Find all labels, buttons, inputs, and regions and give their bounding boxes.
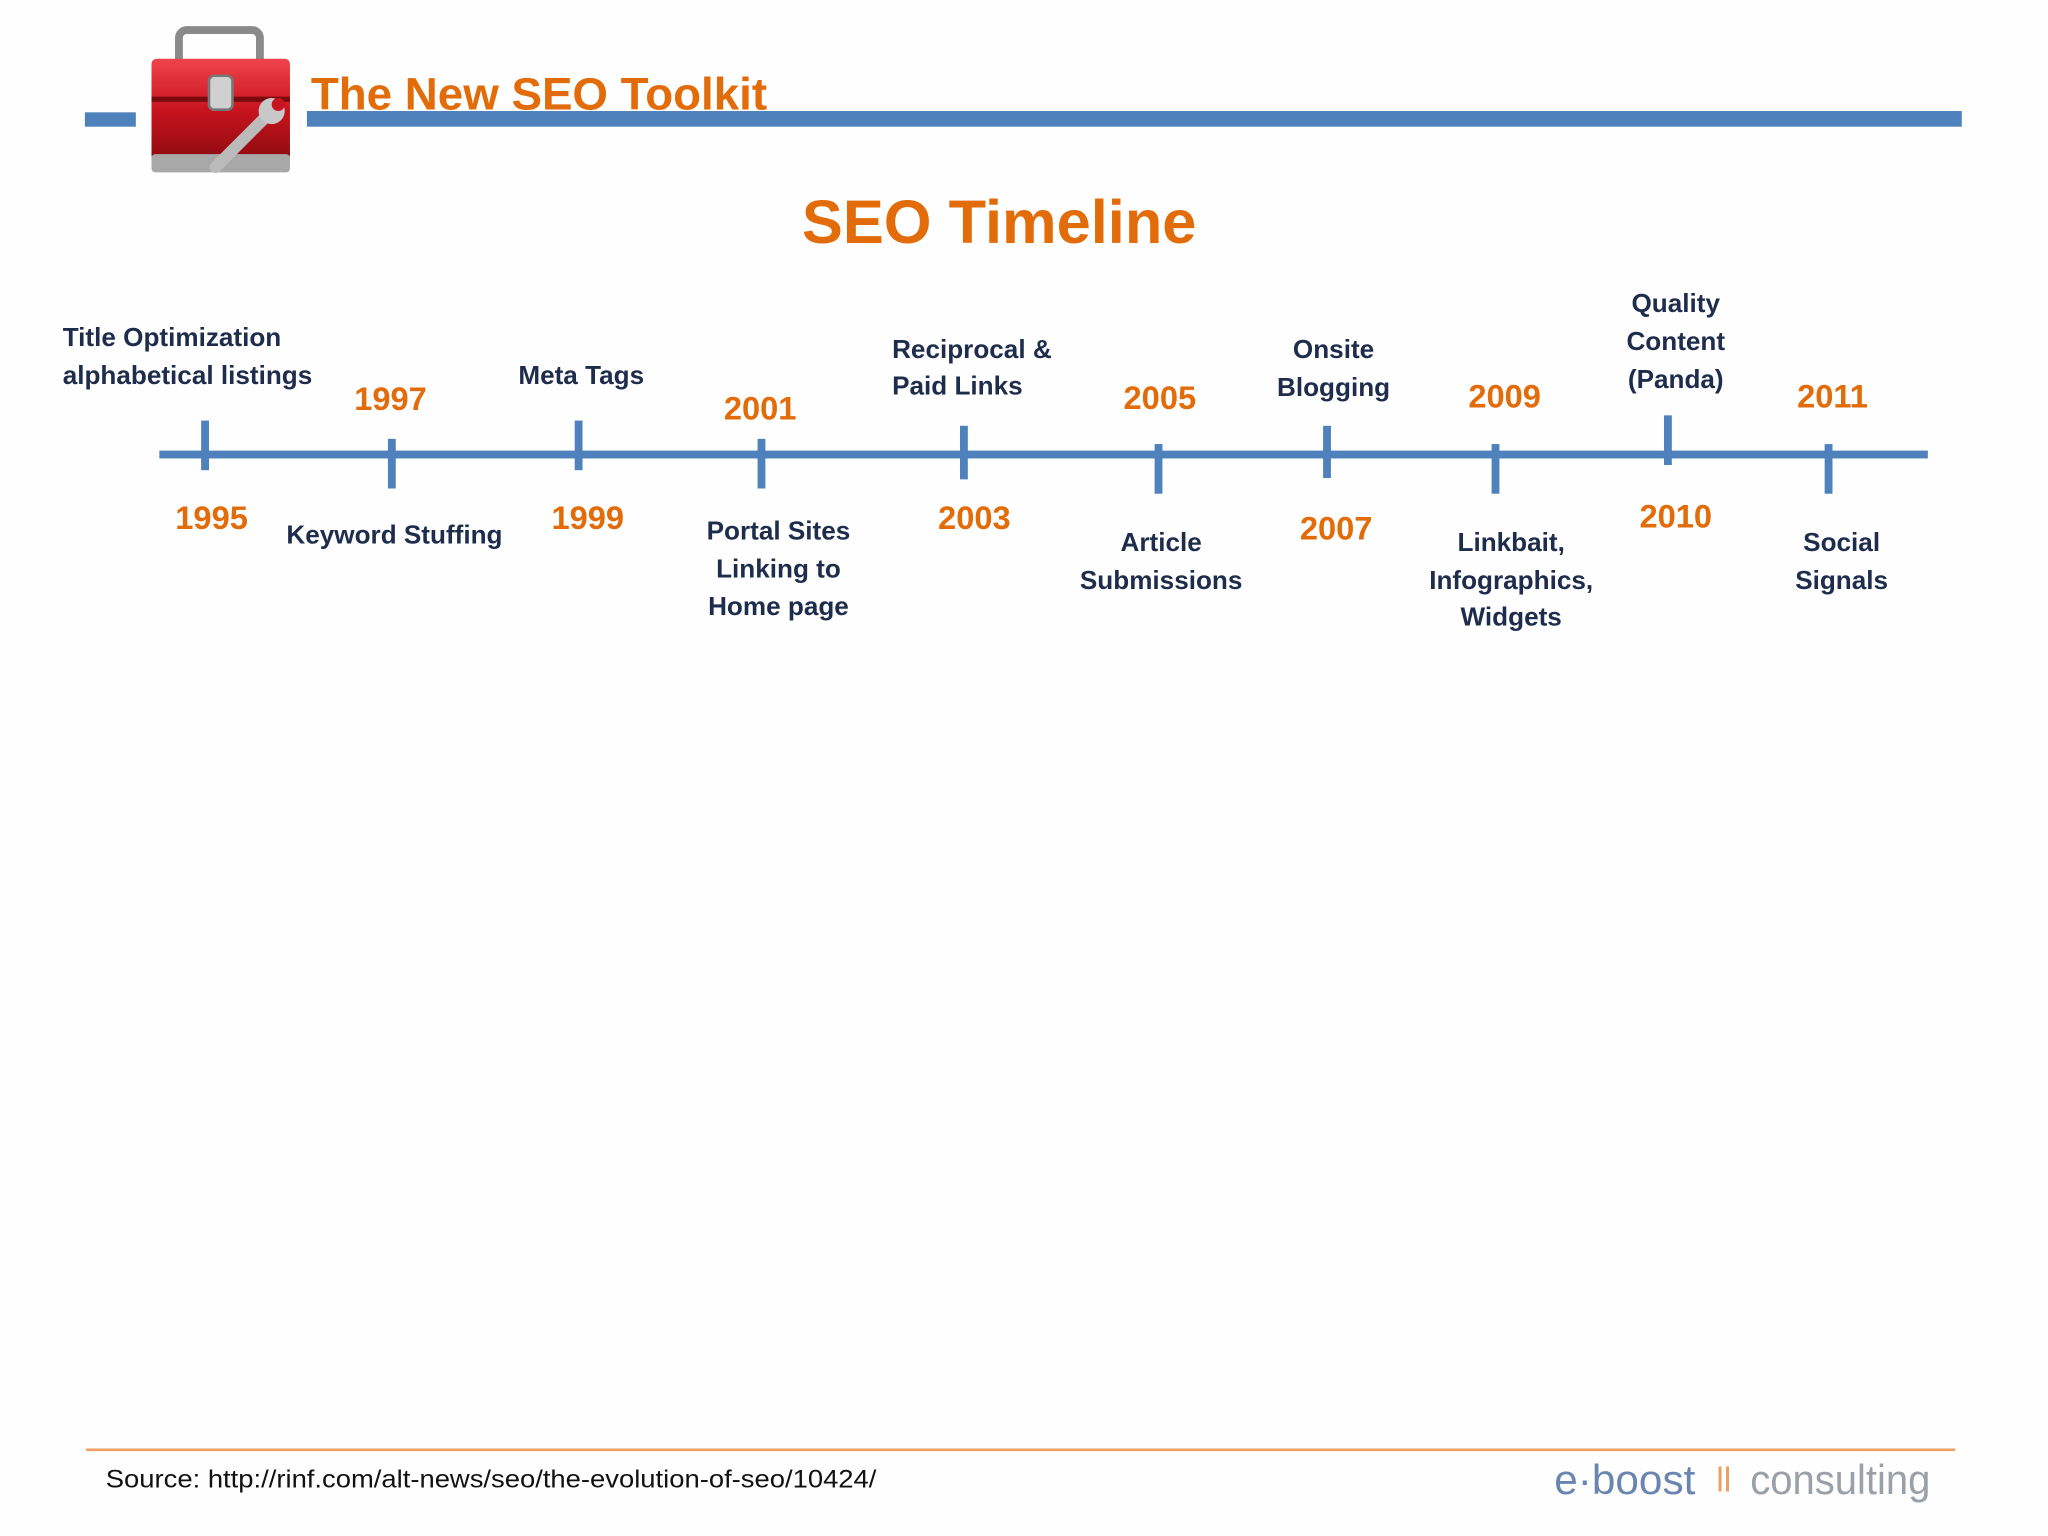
years: 2005 xyxy=(1124,379,1196,416)
milestone labels: Linkbait, xyxy=(1458,527,1565,557)
milestone labels: Title Optimization xyxy=(63,322,281,352)
milestone labels xyxy=(63,288,1888,632)
milestone labels: Content xyxy=(1626,326,1725,356)
milestone labels: Onsite xyxy=(1293,334,1374,364)
years: 1997 xyxy=(354,380,427,417)
logo: e-boost consulting: ll xyxy=(1716,1462,1731,1500)
years: 2003 xyxy=(938,499,1011,536)
milestone labels: Quality xyxy=(1631,288,1720,318)
milestone labels: Social xyxy=(1803,527,1880,557)
years: 2007 xyxy=(1300,509,1372,546)
years: 2011 xyxy=(1797,378,1868,415)
milestone labels: alphabetical listings xyxy=(63,360,312,390)
milestone labels: Home page xyxy=(708,591,849,621)
milestone labels: Linking to xyxy=(716,553,841,583)
logo: e-boost consulting: consulting xyxy=(1750,1456,1930,1503)
timeline axis with ticks xyxy=(159,415,1928,494)
milestone labels: Signals xyxy=(1795,565,1888,595)
heading: SEO Timeline: SEO Timeline xyxy=(802,188,1196,257)
years: 2009 xyxy=(1468,378,1541,415)
milestone labels: Reciprocal & xyxy=(892,334,1052,364)
header bar xyxy=(85,111,1962,127)
milestone labels: Article xyxy=(1121,527,1202,557)
milestone labels: Meta Tags xyxy=(518,360,644,390)
logo: e-boost consulting xyxy=(1554,1456,1930,1503)
years: 2010 xyxy=(1639,498,1712,535)
milestone labels: Submissions xyxy=(1080,565,1242,595)
milestone labels: Portal Sites xyxy=(707,515,850,545)
milestone labels: Widgets xyxy=(1461,602,1562,632)
milestone labels: Keyword Stuffing xyxy=(286,519,503,549)
title: The New SEO Toolkit: The New SEO Toolkit xyxy=(311,69,767,120)
logo: e-boost consulting: e·boost xyxy=(1554,1456,1696,1503)
years: 1995 xyxy=(175,499,248,536)
milestone labels: Infographics, xyxy=(1429,565,1593,595)
milestone labels: (Panda) xyxy=(1628,364,1724,394)
years xyxy=(175,378,1868,546)
milestone labels: Blogging xyxy=(1277,372,1390,402)
footer line xyxy=(86,1448,1955,1451)
years: 1999 xyxy=(551,499,624,536)
source text: Source: http://rinf.com/alt-news/seo/the-evolution-of-seo/10424/ xyxy=(106,1467,877,1494)
icon: toolbox xyxy=(152,30,290,172)
years: 2001 xyxy=(724,389,796,426)
milestone labels: Paid Links xyxy=(892,370,1023,400)
